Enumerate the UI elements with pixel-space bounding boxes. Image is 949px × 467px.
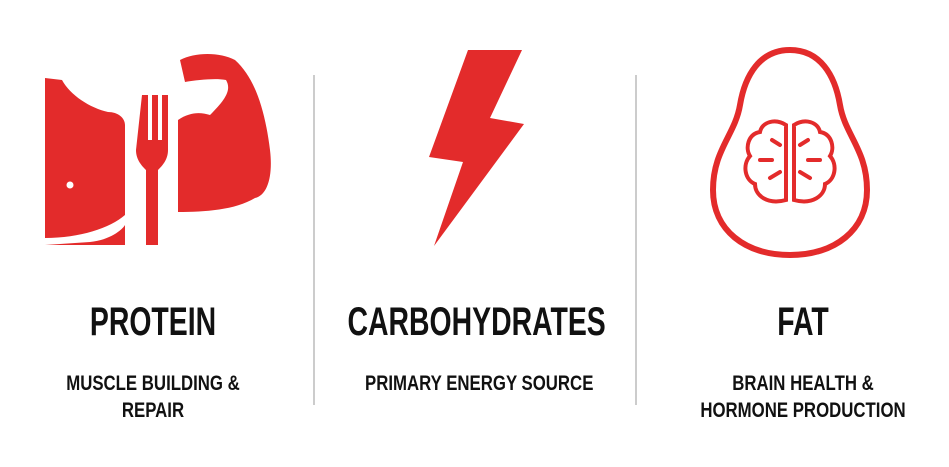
- text: fat: BRAIN HEALTH &: [732, 372, 874, 395]
- text: protein: REPAIR: [122, 399, 184, 422]
- text: protein: [66, 372, 240, 422]
- text: carbohydrates: PRIMARY ENERGY SOURCE: [365, 372, 593, 395]
- heading: protein: PROTEIN: [90, 300, 216, 344]
- text: fat: HORMONE PRODUCTION: [700, 399, 906, 422]
- heading: fat: FAT: [777, 300, 829, 344]
- heading: carbohydrates: CARBOHYDRATES: [348, 300, 606, 344]
- text: fat: [700, 372, 906, 422]
- text: protein: MUSCLE BUILDING &: [66, 372, 240, 395]
